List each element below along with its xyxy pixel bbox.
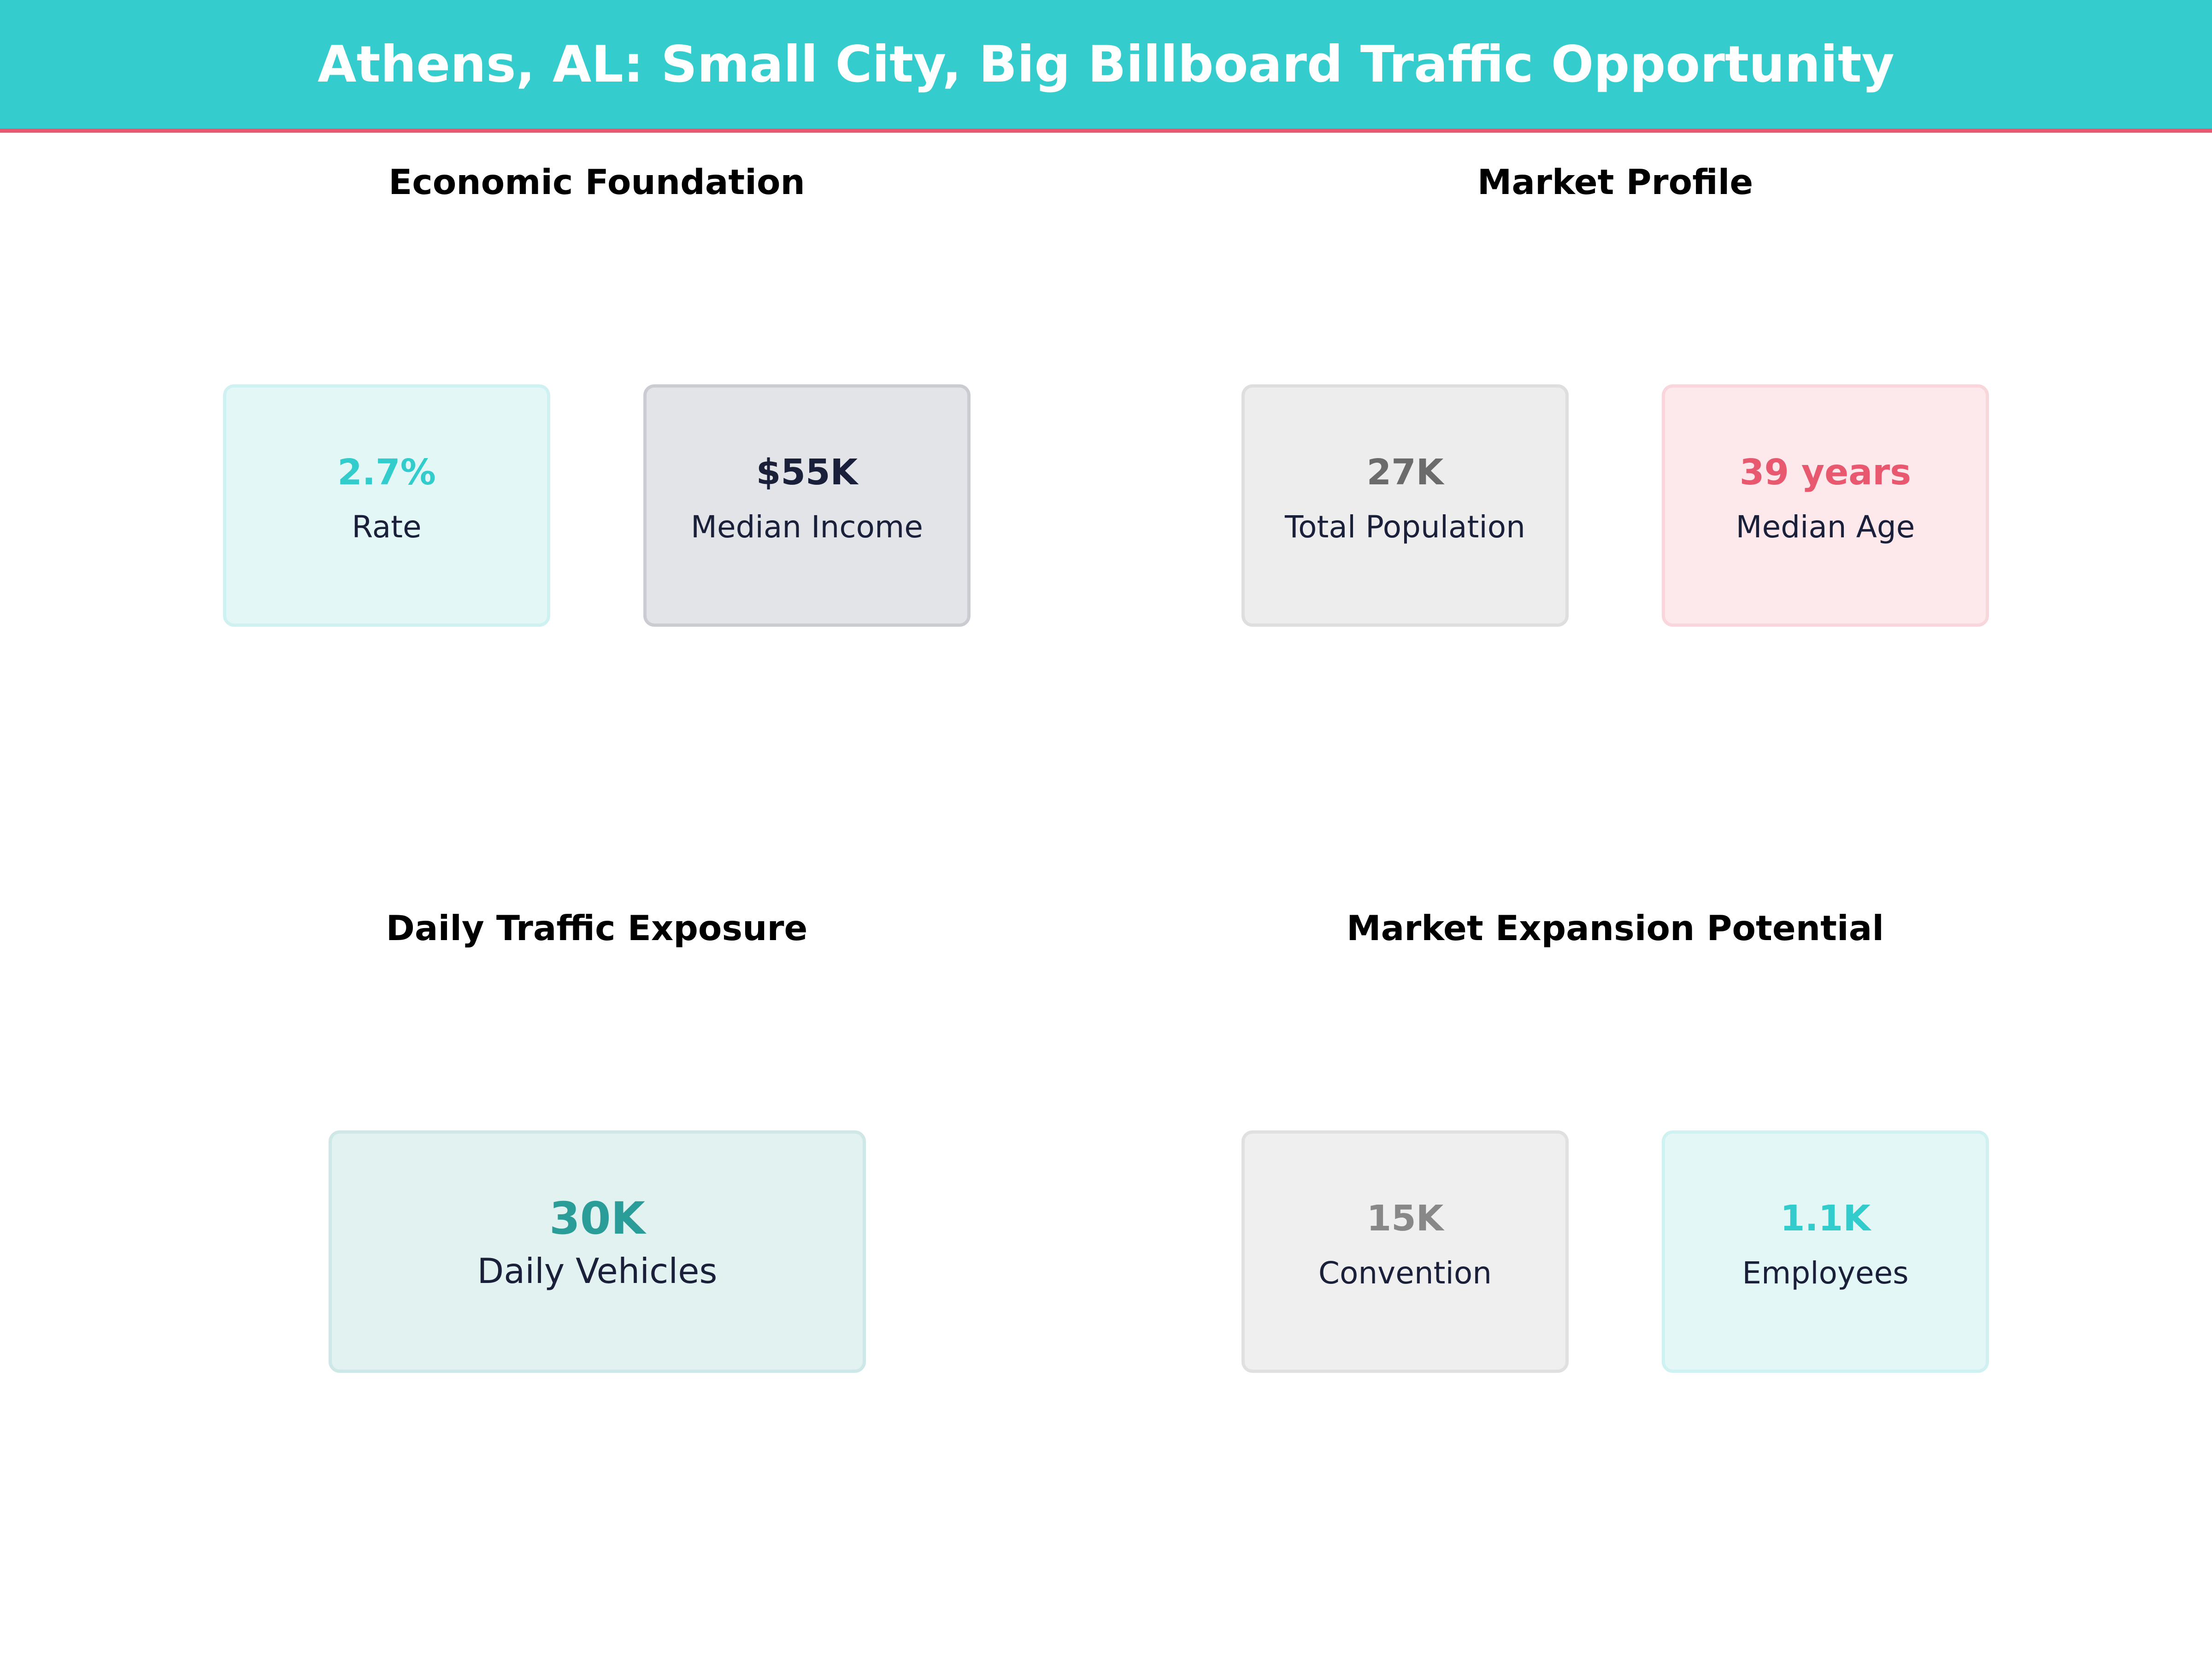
heading: Market Profile: Market Profile bbox=[1477, 162, 1753, 202]
card: Rate: Rate bbox=[352, 509, 422, 545]
card: Median Age: Median Age bbox=[1736, 509, 1915, 545]
card: Employees: 1.1K bbox=[1780, 1198, 1871, 1239]
title: Athens, AL: Small City, Big Billboard Traffic Opportunity bbox=[318, 35, 1894, 94]
card: Daily Vehicles: Daily Vehicles bbox=[477, 1251, 717, 1291]
card: Median Age bbox=[1662, 384, 1989, 627]
card: Median Age: 39 years bbox=[1740, 452, 1911, 493]
heading: Daily Traffic Exposure: Daily Traffic Exposure bbox=[386, 908, 807, 948]
card: Total Population: 27K bbox=[1367, 452, 1443, 493]
card: Median Income: $55K bbox=[756, 452, 858, 493]
card: Rate bbox=[223, 384, 550, 627]
card: Total Population: Total Population bbox=[1285, 509, 1525, 545]
card: Median Income bbox=[643, 384, 971, 627]
card: Daily Vehicles bbox=[329, 1130, 866, 1373]
card: Rate: 2.7% bbox=[337, 452, 436, 493]
card: Convention: Convention bbox=[1318, 1255, 1492, 1291]
heading: Economic Foundation: Economic Foundation bbox=[388, 162, 805, 202]
card: Employees: Employees bbox=[1742, 1255, 1909, 1291]
card: Median Income: Median Income bbox=[691, 509, 923, 545]
card: Daily Vehicles: 30K bbox=[549, 1193, 645, 1244]
heading: Market Expansion Potential: Market Expansion Potential bbox=[1347, 908, 1884, 948]
card: Convention: 15K bbox=[1367, 1198, 1443, 1239]
card: Convention bbox=[1241, 1130, 1569, 1373]
card: Total Population bbox=[1241, 384, 1569, 627]
card: Employees bbox=[1662, 1130, 1989, 1373]
header banner bbox=[0, 0, 2212, 133]
